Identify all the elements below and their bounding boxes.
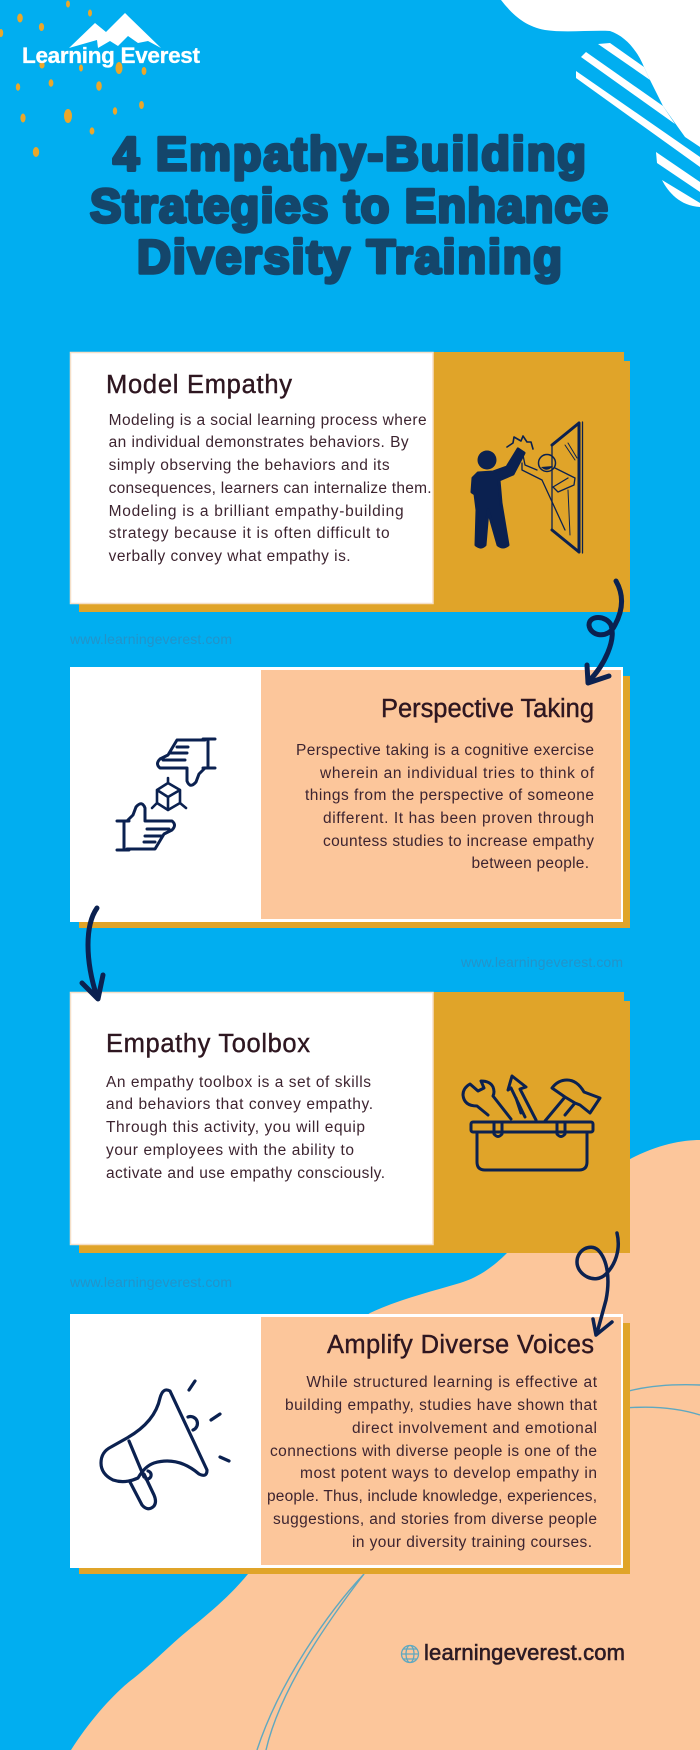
- website text: learningeverest.com: [424, 1640, 625, 1665]
- peach panel: [261, 670, 621, 919]
- peach panel: [261, 1317, 621, 1565]
- heading: Amplify Diverse Voices: [327, 1331, 594, 1359]
- body text: While structured learning is effective at: [306, 1374, 598, 1391]
- body text: simply observing the behaviors and its: [109, 457, 390, 474]
- body text: connections with diverse people is one of the: [270, 1443, 597, 1460]
- body text: activate and use empathy consciously.: [106, 1165, 385, 1182]
- body text: and behaviors that convey empathy.: [106, 1096, 373, 1113]
- white card: [70, 1314, 623, 1568]
- peach background shape: [71, 1140, 700, 1750]
- title: 4 Empathy-Building: [113, 127, 586, 180]
- icon: megaphone: [101, 1381, 229, 1509]
- gold backing: [79, 352, 630, 612]
- heading: Empathy Toolbox: [106, 1030, 310, 1058]
- white corner shape with stripes: [501, 0, 700, 207]
- panel: empathy toolbox: [70, 992, 630, 1253]
- body text: things from the perspective of someone: [305, 787, 594, 804]
- white card: [70, 667, 623, 922]
- body text: Modeling is a brilliant empathy-building: [109, 503, 404, 520]
- body text: building empathy, studies have shown that: [285, 1397, 598, 1414]
- icon: globe: [402, 1646, 418, 1662]
- body text: an individual demonstrates behaviors. By: [109, 434, 409, 451]
- heading: Perspective Taking: [381, 695, 594, 723]
- body text: consequences, learners can internalize them.: [109, 480, 432, 497]
- body text: suggestions, and stories from diverse people: [273, 1511, 597, 1528]
- arrow: model to perspective: [587, 581, 622, 683]
- body text: [106, 1074, 385, 1182]
- arrow: perspective to toolbox: [82, 908, 103, 999]
- body text: people. Thus, include knowledge, experiences,: [267, 1488, 597, 1505]
- body text: An empathy toolbox is a set of skills: [106, 1074, 371, 1091]
- logo: [22, 13, 200, 68]
- icon: mountains: [69, 13, 161, 48]
- body text: Modeling is a social learning process where: [109, 412, 427, 429]
- body text: wherein an individual tries to think of: [319, 765, 595, 782]
- watermark 1: www.learningeverest.com: [69, 631, 232, 647]
- watermark 3: www.learningeverest.com: [69, 1274, 232, 1290]
- body text: [296, 742, 595, 872]
- footer website: [402, 1640, 625, 1665]
- white card: [70, 992, 433, 1244]
- watermark 2: www.learningeverest.com: [460, 954, 623, 970]
- body text: your employees with the ability to: [106, 1142, 354, 1159]
- panel: model empathy: [70, 352, 630, 612]
- panel: perspective taking: [70, 667, 630, 928]
- title: [90, 127, 608, 283]
- body text: in your diversity training courses.: [352, 1534, 592, 1551]
- title: Diversity Training: [137, 230, 562, 283]
- body text: most potent ways to develop empathy in: [300, 1465, 597, 1482]
- icon: framing hands with cube: [117, 739, 215, 850]
- body text: Perspective taking is a cognitive exercise: [296, 742, 594, 759]
- icon: high five through door: [472, 422, 582, 553]
- gold confetti dots: [0, 0, 146, 157]
- body text: [267, 1374, 598, 1551]
- body text: strategy because it is often difficult to: [109, 525, 390, 542]
- heading: Model Empathy: [106, 371, 292, 399]
- body text: [109, 412, 432, 565]
- body text: different. It has been proven through: [323, 810, 594, 827]
- icon: toolbox: [463, 1076, 600, 1170]
- gold backing: [79, 992, 630, 1253]
- body text: Through this activity, you will equip: [106, 1119, 365, 1136]
- teal decorative curves: [257, 1385, 700, 1750]
- body text: verbally convey what empathy is.: [109, 548, 351, 565]
- panel: amplify diverse voices: [70, 1314, 630, 1574]
- arrow: toolbox to voices: [577, 1233, 618, 1335]
- gold backing: [79, 676, 630, 928]
- logo wordmark: Learning Everest: [22, 43, 200, 68]
- white card: [70, 352, 433, 604]
- body text: direct involvement and emotional: [352, 1420, 597, 1437]
- title: Strategies to Enhance: [90, 179, 608, 232]
- body text: between people.: [472, 855, 589, 872]
- body text: countess studies to increase empathy: [323, 833, 594, 850]
- gold backing: [79, 1323, 630, 1574]
